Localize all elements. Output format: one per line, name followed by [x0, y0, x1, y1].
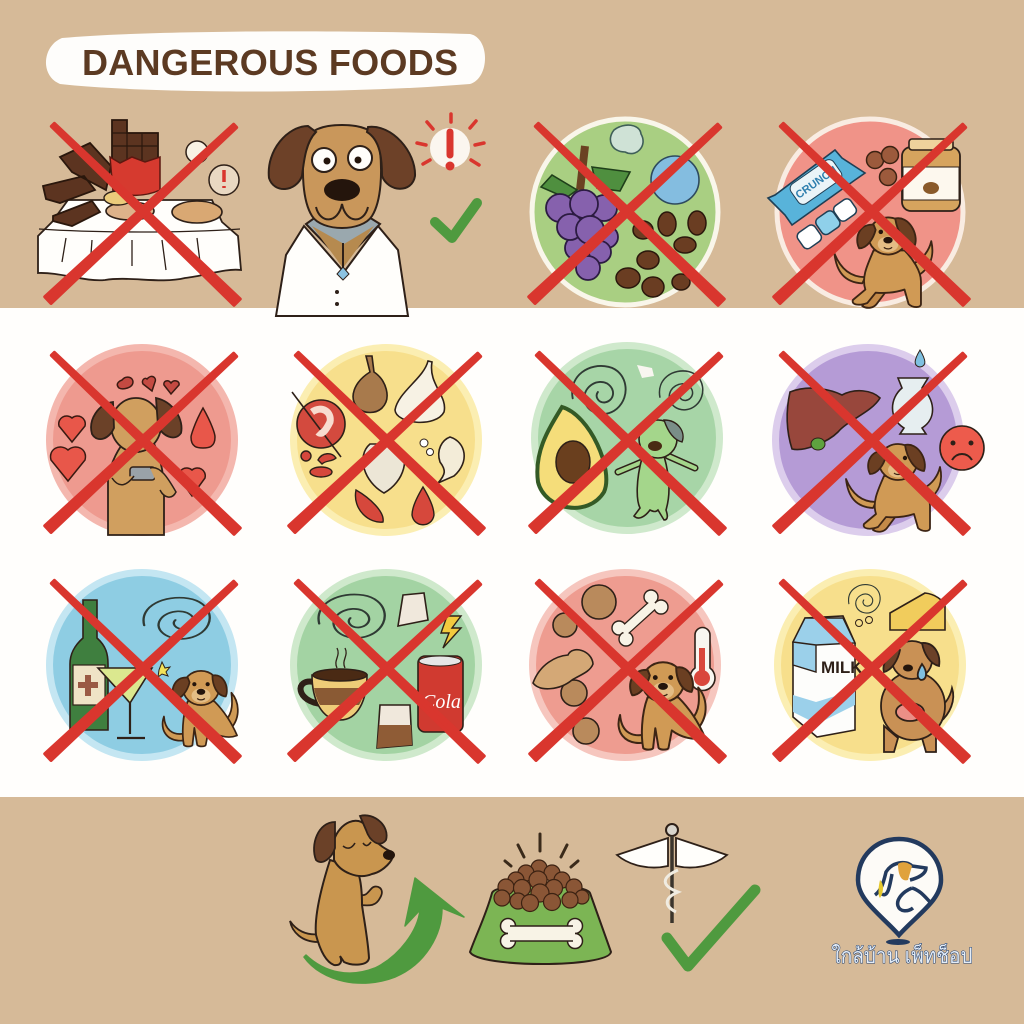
kibble: [494, 860, 589, 912]
red cross: [530, 581, 725, 762]
red cross: [774, 581, 969, 762]
red cross: [774, 353, 969, 534]
panel: caffeine: [289, 569, 484, 762]
ears: [314, 822, 335, 862]
dog body: [108, 440, 164, 535]
peanut butter jar: [902, 147, 960, 211]
title banner: DANGEROUS FOODS: [82, 42, 458, 83]
white coat: [276, 226, 408, 316]
panel: onions and garlic: [289, 344, 484, 536]
table with cloth: [38, 200, 241, 280]
raisins: [616, 211, 706, 297]
bar wrapper: [110, 157, 160, 195]
panel: vet dog with check: [269, 114, 484, 316]
logo text: ใกล้บ้าน เพ็ทช็อป: [832, 942, 972, 968]
cooked chicken: [533, 650, 593, 689]
water drop: [915, 350, 925, 367]
dog head: [111, 398, 161, 452]
avocado: [537, 407, 606, 508]
cloth folds: [39, 229, 240, 270]
red cross: [774, 124, 969, 305]
red cross: [530, 353, 725, 534]
liver: [787, 388, 880, 450]
green arrow: [304, 878, 464, 983]
jar: [892, 378, 933, 434]
shirt collar: [306, 214, 380, 262]
nose: [383, 850, 395, 860]
macadamia nuts: [553, 585, 616, 744]
onion: [353, 356, 387, 412]
lightning: [441, 616, 461, 648]
chocolate slabs: [43, 143, 111, 203]
macadamia circle: [297, 400, 345, 448]
pin base: [886, 939, 910, 945]
phone in paws: [130, 467, 155, 480]
bowl: [470, 885, 611, 964]
wings: [617, 838, 668, 868]
nose: [324, 179, 360, 201]
chocolate bar: [112, 120, 158, 165]
dizzy swirl: [144, 598, 210, 639]
thermometer: [690, 628, 715, 690]
milk carton: [793, 616, 855, 737]
closed eye: [343, 842, 371, 848]
panel: grapes and raisins: [529, 119, 724, 305]
logo: pet shop map pin: [832, 839, 972, 968]
bone: [612, 590, 668, 646]
green dog: [618, 420, 695, 520]
red cross: [45, 353, 240, 534]
white centre band: [0, 308, 1024, 797]
cheese: [890, 593, 945, 630]
title banner: [46, 31, 485, 92]
tail: [290, 921, 320, 942]
alert icon: [430, 128, 470, 168]
shine rays: [505, 834, 578, 867]
panel: chocolate table: [38, 120, 241, 305]
tea bag bottom: [377, 705, 412, 748]
staff ring: [666, 824, 678, 836]
footer: dog bowl with bone: [470, 834, 611, 964]
panel: avocado: [530, 342, 725, 534]
red cross: [289, 581, 484, 762]
bubbles and clove: [420, 439, 428, 447]
swirl blob: [610, 125, 643, 154]
red blood bits: [301, 451, 434, 525]
panel: nuts, bones, fever: [529, 569, 725, 762]
dog: [619, 662, 706, 750]
star: [158, 662, 170, 677]
staff: [670, 836, 674, 923]
green check: [435, 203, 477, 238]
blue sick blob: [651, 156, 699, 204]
candies: [795, 197, 858, 251]
panel: chocolate poisoning hearts: [45, 344, 240, 536]
gall bladder: [811, 438, 825, 450]
nuts: [866, 146, 898, 186]
tea bag top: [398, 593, 428, 626]
red cross: [289, 353, 484, 534]
garlic top: [395, 361, 445, 422]
dizzy swirl: [319, 594, 385, 638]
coffee cup: [312, 675, 367, 720]
green check: [667, 890, 755, 966]
bloated dog: [881, 641, 953, 752]
panel: milk and cheese: MILK: [821, 658, 863, 677]
panel: alcohol: [45, 569, 240, 762]
garlic bottom: [363, 444, 405, 493]
hearts and drop: [51, 376, 215, 496]
dog: [846, 444, 941, 532]
cup handle: [301, 682, 322, 704]
dog and cat line mark: [875, 863, 926, 895]
panel: xylitol candy and peanut butter: CRUNCH: [794, 164, 840, 201]
warning bubble: [209, 165, 239, 195]
bar grid: [112, 133, 158, 160]
dizzy swirl: [849, 585, 880, 613]
panel: caffeine: Cola: [422, 691, 461, 713]
cup band: [314, 688, 365, 705]
snake: [665, 870, 678, 912]
steam: [336, 648, 346, 668]
body: [316, 860, 369, 965]
bubbles: [856, 620, 862, 626]
swirl left: [572, 366, 626, 414]
candy bar: [768, 150, 865, 225]
red cross: [45, 124, 240, 305]
head: [334, 821, 393, 876]
dog: [163, 671, 238, 746]
eyes: [312, 148, 336, 172]
panel: xylitol candy and peanut butter: [768, 119, 969, 308]
pin: [858, 839, 941, 935]
bottle: [70, 600, 108, 730]
grape bunch: [546, 190, 618, 280]
footer: dog with green arrow: [290, 815, 464, 983]
panel: milk and cheese: [774, 569, 969, 762]
wrapped sweet: [186, 141, 208, 163]
coffee surface: [313, 669, 367, 681]
paw: [360, 886, 382, 905]
swirl right: [659, 371, 703, 410]
plates of food: [172, 201, 222, 223]
ears: [269, 126, 316, 189]
head: [303, 125, 381, 228]
bone on bowl: [500, 918, 582, 948]
sad face: [940, 426, 984, 470]
panel: liver and sad face: [772, 344, 984, 536]
martini glass: [98, 668, 152, 703]
cola can: [418, 656, 463, 732]
mouth: [316, 204, 368, 219]
bone fragment: [637, 365, 654, 378]
red cross: [45, 581, 240, 762]
footer: caduceus and check: [617, 824, 755, 966]
chocolate slab on table: [53, 201, 100, 226]
red cross: [529, 124, 724, 305]
dog: [834, 217, 932, 308]
